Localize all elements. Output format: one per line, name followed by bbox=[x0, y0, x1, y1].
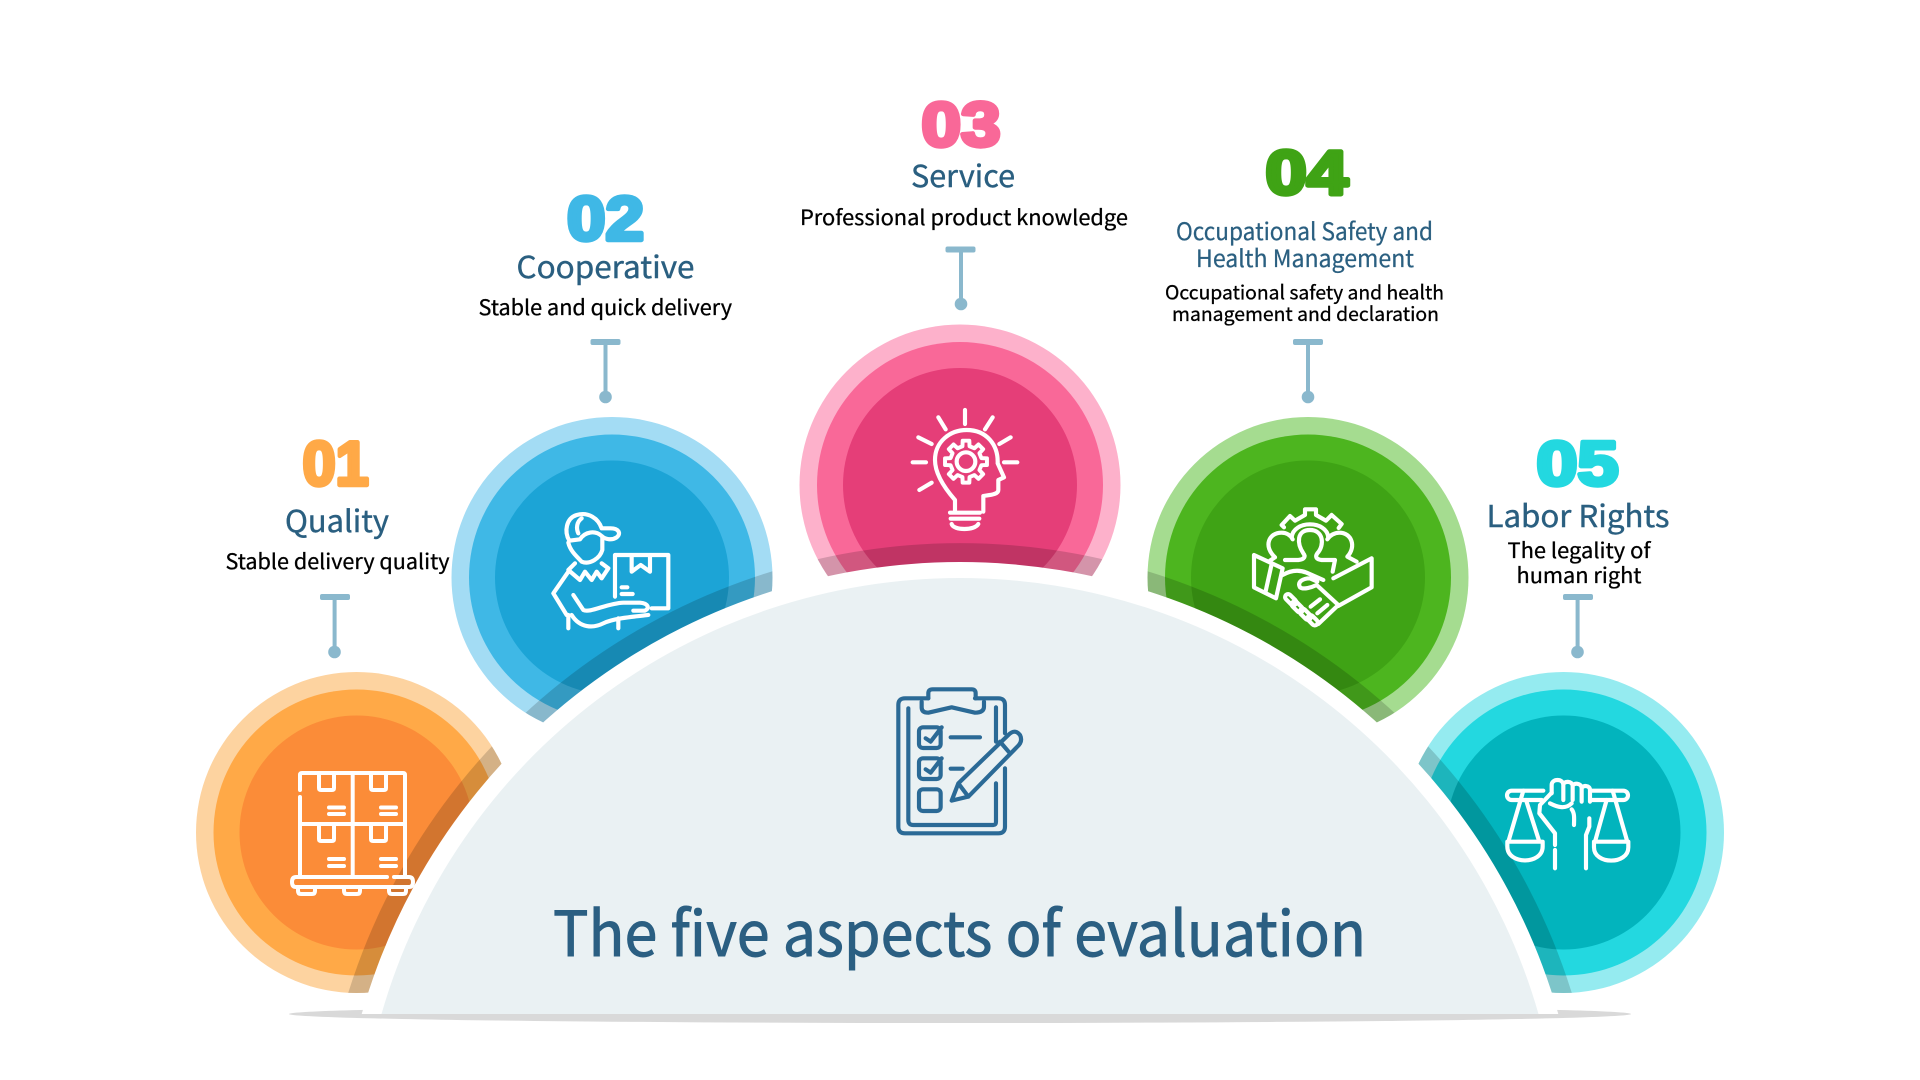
icon: light bulb head with gear bbox=[913, 410, 1017, 529]
heading block: 03 service bbox=[800, 91, 1128, 232]
circle: cooperative (blue) bbox=[452, 417, 772, 722]
heading block: 01 quality: Stable delivery quality bbox=[226, 546, 450, 576]
connector: quality bbox=[320, 594, 350, 658]
heading block: 04 occupational safety: Occupational Safety and bbox=[1176, 212, 1433, 247]
heading block: 04 occupational safety: Occupational safety and health bbox=[1165, 276, 1444, 306]
connector: service bbox=[946, 246, 976, 310]
heading block: 02 cooperative: Cooperative bbox=[516, 243, 694, 287]
icon: delivery man bbox=[553, 514, 668, 628]
heading block: 05 labor rights bbox=[1486, 430, 1670, 590]
heading block: 04 occupational safety bbox=[1165, 139, 1444, 327]
heading block: 02 cooperative: Stable and quick delivery bbox=[478, 292, 732, 322]
central dome bbox=[362, 562, 1558, 1014]
icon: clipboard checklist bbox=[898, 689, 1021, 833]
heading block: 05 labor rights: human right bbox=[1516, 560, 1642, 590]
heading block: 01 quality: Quality bbox=[285, 497, 389, 541]
connector: occupational safety bbox=[1293, 339, 1323, 403]
circle: occupational safety (green) bbox=[1148, 417, 1468, 722]
circle: quality (orange) bbox=[196, 672, 502, 993]
base shadow bbox=[289, 1005, 1631, 1023]
heading block: 04 occupational safety: Health Management bbox=[1196, 239, 1414, 274]
connector: cooperative bbox=[590, 339, 620, 403]
heading block: 03 service: 03 bbox=[922, 91, 1000, 160]
heading block: 02 cooperative bbox=[478, 185, 732, 322]
heading block: 01 quality bbox=[226, 430, 450, 576]
heading block: 05 labor rights: 05 bbox=[1536, 430, 1618, 499]
heading block: 05 labor rights: The legality of bbox=[1508, 535, 1652, 565]
icon: team and handshake bbox=[1254, 509, 1372, 627]
circle: service (pink) bbox=[800, 324, 1120, 576]
heading block: 02 cooperative: 02 bbox=[567, 185, 644, 254]
heading block: 03 service: Professional product knowledge bbox=[800, 202, 1128, 232]
title: The five aspects of evaluation bbox=[553, 884, 1366, 974]
heading block: 05 labor rights: Labor Rights bbox=[1486, 492, 1670, 536]
icon: fist and scales bbox=[1507, 780, 1628, 868]
heading block: 04 occupational safety: management and declaration bbox=[1172, 298, 1439, 327]
heading block: 03 service: Service bbox=[911, 152, 1015, 196]
circle: labor rights (cyan) bbox=[1418, 672, 1724, 993]
icon: pallet of boxes bbox=[292, 773, 413, 894]
connector: labor rights bbox=[1563, 594, 1593, 658]
heading block: 04 occupational safety: 04 bbox=[1266, 139, 1349, 208]
heading block: 01 quality: 01 bbox=[303, 430, 369, 499]
